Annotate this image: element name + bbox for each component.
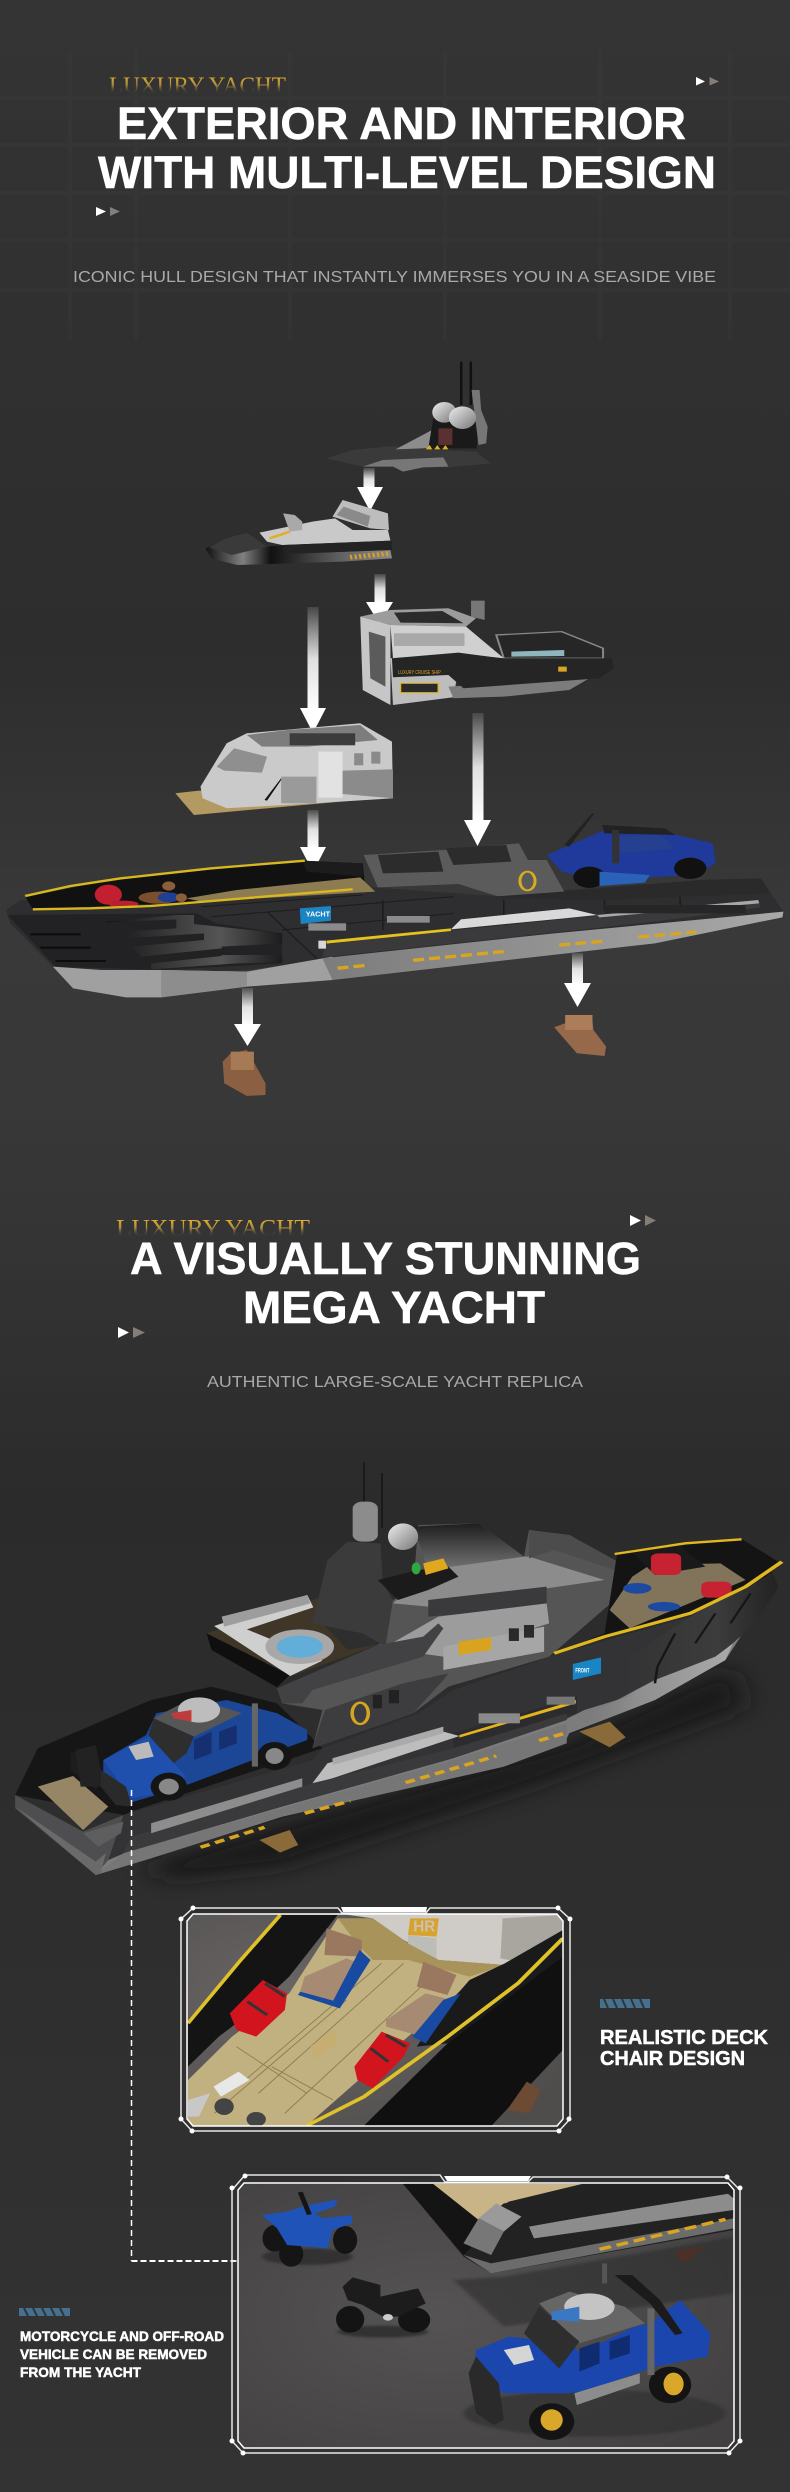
support block right — [554, 1015, 606, 1056]
yacht: full assembled view — [15, 1462, 782, 1880]
main hull with off-road vehicle — [6, 813, 783, 997]
callout: deck chair: CHAIR DESIGN — [600, 2048, 745, 2070]
arrow — [464, 713, 491, 846]
panel: removable vehicles — [230, 2174, 742, 2456]
diagram: exploded yacht levels — [6, 362, 783, 1096]
photo: deck chairs and barrels: HR — [413, 1917, 436, 1935]
title: WITH MULTI-LEVEL DESIGN — [98, 147, 716, 198]
module: forward cabin — [175, 723, 393, 815]
tag: hatch bar — [19, 2308, 70, 2316]
photo: deck chairs and barrels — [187, 1913, 566, 2127]
panel: deck chair detail — [178, 1906, 572, 2134]
icon: lower double arrow — [118, 1327, 145, 1338]
hull and superstructure: FRONT — [575, 1666, 590, 1674]
subtitle: AUTHENTIC LARGE-SCALE YACHT REPLICA — [207, 1374, 584, 1391]
callout: removable vehicles: VEHICLE CAN BE REMOVED — [20, 2346, 207, 2362]
callout: removable vehicles: FROM THE YACHT — [20, 2364, 141, 2380]
arrow — [234, 988, 261, 1046]
module: mast and top deck — [326, 362, 491, 472]
frame — [178, 1906, 572, 2134]
arrow — [300, 810, 326, 872]
callout: removable vehicles: MOTORCYCLE AND OFF-ROAD — [20, 2328, 224, 2344]
antennas — [363, 1462, 383, 1528]
callout: removable vehicles — [20, 2328, 224, 2380]
frame — [230, 2174, 742, 2456]
title — [98, 98, 716, 198]
title: EXTERIOR AND INTERIOR — [117, 98, 686, 149]
support block left — [223, 1050, 266, 1096]
subtitle: ICONIC HULL DESIGN THAT INSTANTLY IMMERSES YOU IN A SEASIDE VIBE — [73, 269, 716, 286]
icon: top double arrow — [696, 77, 719, 86]
heading: section 2 — [116, 1215, 656, 1391]
connector: dashed leader line — [132, 1790, 264, 2261]
eyebrow: luxury yacht: LUXURY YACHT — [116, 1215, 310, 1242]
arrow — [357, 468, 383, 511]
title: A VISUALLY STUNNING — [130, 1233, 641, 1284]
callout: deck chair — [600, 2027, 769, 2070]
off-road vehicle on deck — [76, 1697, 307, 1807]
icon: top double arrow — [630, 1215, 656, 1226]
main hull with off-road vehicle: YACHT — [306, 910, 330, 918]
arrow — [300, 607, 326, 733]
tag: hatch bar — [600, 1999, 650, 2008]
title: MEGA YACHT — [243, 1282, 545, 1333]
arrow — [366, 574, 393, 624]
icon: lower double arrow — [96, 207, 120, 216]
module: pool deck: LUXURY CRUISE SHIP — [398, 669, 441, 676]
shadow — [151, 1667, 746, 1880]
module: wheelhouse deck — [206, 500, 392, 565]
eyebrow: luxury yacht: LUXURY YACHT — [109, 73, 286, 98]
heading: section 1 — [73, 73, 719, 286]
arrow — [564, 953, 591, 1007]
photo: motorcycles and off-road vehicle — [238, 2183, 734, 2448]
hull and superstructure — [15, 1502, 782, 1875]
title — [130, 1233, 641, 1333]
module: pool deck — [360, 601, 614, 705]
callout: deck chair: REALISTIC DECK — [600, 2027, 769, 2049]
